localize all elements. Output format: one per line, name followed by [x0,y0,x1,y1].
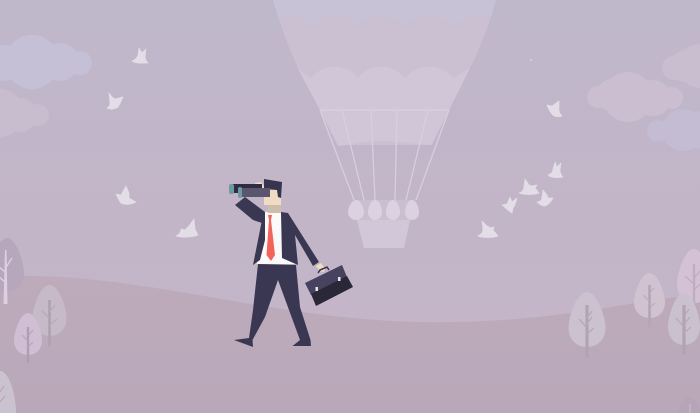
balloon burners [348,200,419,220]
hot air balloon [273,0,496,248]
tree, right of centre [568,292,606,358]
balloon basket [357,200,410,248]
tree, upper right [677,249,700,305]
hill [0,276,700,413]
cloud: lower right blue [647,109,700,151]
bird [132,48,148,63]
bird [547,101,562,117]
shirt [256,212,296,264]
tree, bottom right [678,397,700,413]
tree, left large [32,285,66,346]
balloon scalloped lower band [298,67,470,146]
bird [176,219,198,237]
flock of birds [107,48,563,238]
briefcase [305,265,353,306]
cloud: left pink [0,89,49,137]
bird [107,93,123,109]
trousers and shoes [234,264,311,347]
bird [548,162,563,178]
cloud: centre right pink [587,72,683,122]
balloon ropes [320,110,449,200]
bird [519,179,539,194]
bird [537,190,553,206]
tree, far left [0,238,24,304]
businessman [229,179,353,347]
bird [502,197,517,213]
bird [116,186,136,204]
bird [478,221,498,238]
lowered hand [316,263,325,272]
red tie [266,215,275,261]
tree, bottom left [0,371,16,413]
tiny distant bird [530,59,532,61]
hair [264,179,282,198]
balloon scalloped middle band [279,16,490,145]
jacket right side and lowered arm [281,212,319,266]
jacket left side and raised arm [235,197,265,265]
tree, far right middle [634,273,665,327]
balloon envelope top [273,0,496,145]
cloud: top left blue [0,35,92,89]
tree, far right front [668,293,700,355]
raised hand [255,182,264,189]
neck [268,205,281,213]
cloud: top right pink [662,44,700,88]
balloon load ring [320,109,449,111]
binoculars [229,184,270,198]
face [264,186,281,205]
tree, left small [14,313,42,363]
